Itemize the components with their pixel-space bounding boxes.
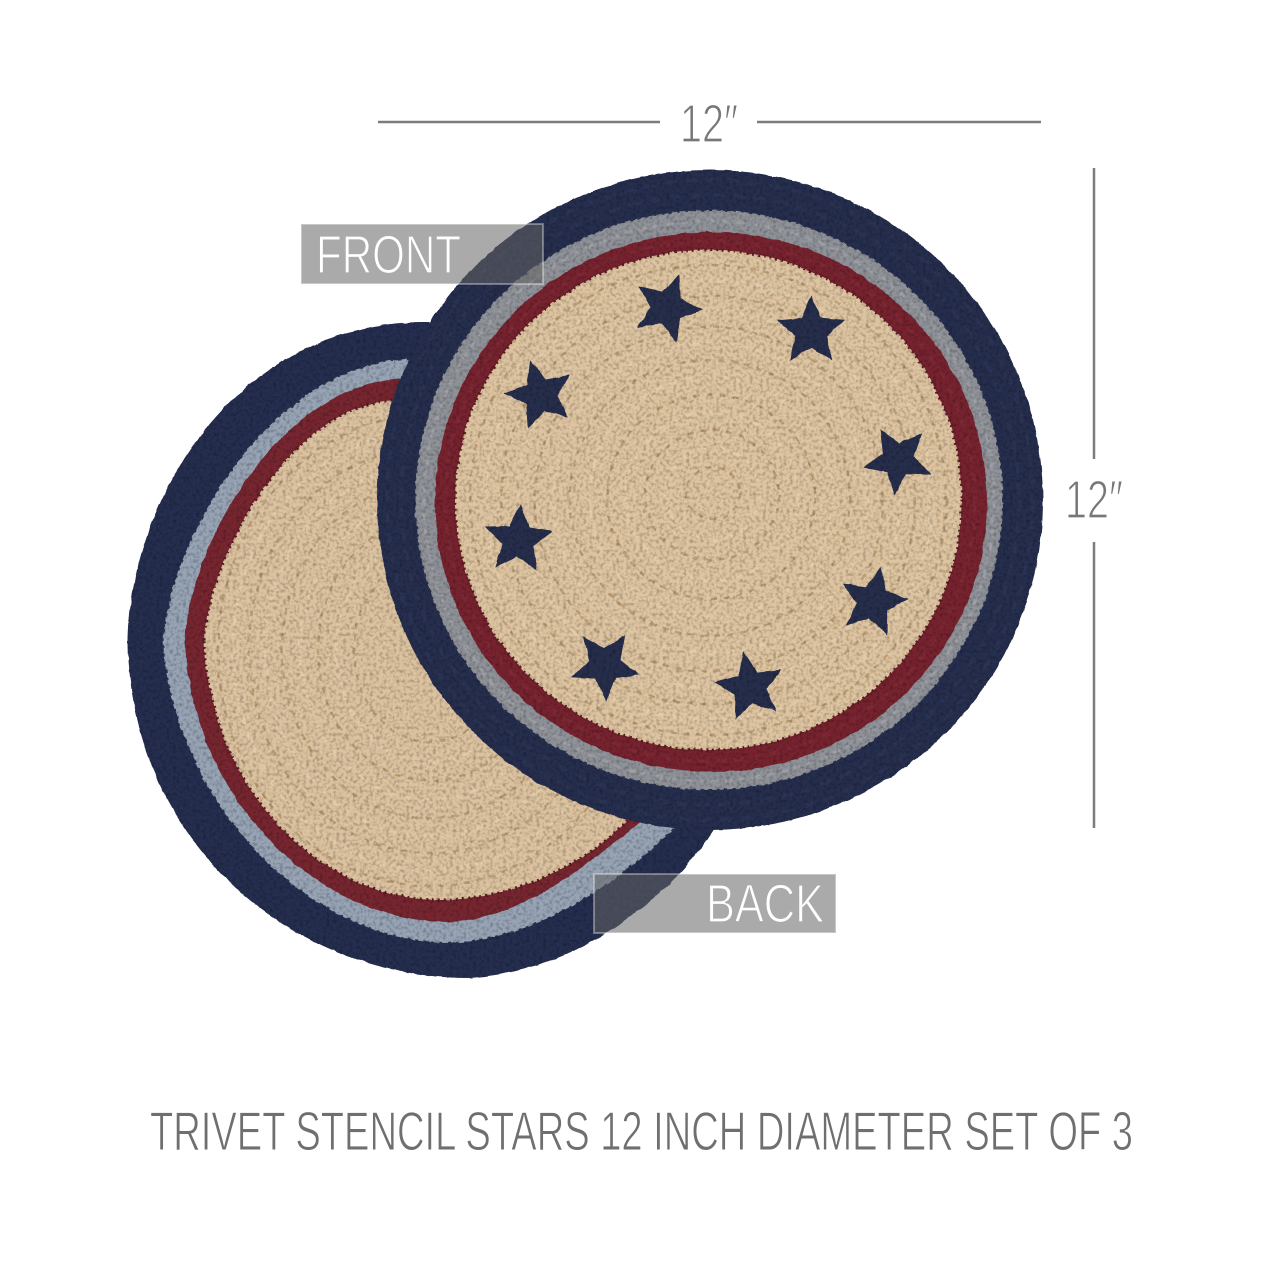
- star 3: [860, 427, 935, 499]
- front trivet gray braid row: [424, 221, 994, 781]
- width dimension: 12″: [680, 94, 738, 154]
- star 5: [710, 645, 789, 722]
- label: back: [594, 874, 836, 934]
- front trivet navy border: [377, 170, 1043, 830]
- stars ring: [482, 262, 935, 722]
- star 4: [833, 559, 914, 638]
- back trivet: [128, 322, 740, 978]
- star 7: [482, 502, 555, 571]
- label: back: BACK: [706, 874, 824, 934]
- front trivet navy braid rows: [387, 180, 1033, 820]
- front trivet tan centre: [455, 250, 962, 750]
- front trivet red braid row: [445, 241, 975, 761]
- back trivet tan centre: [204, 400, 660, 900]
- back trivet red ring: [185, 378, 680, 922]
- front trivet: [377, 170, 1043, 830]
- star 8: [497, 351, 581, 432]
- label: front: FRONT: [316, 225, 461, 285]
- front trivet red ring: [435, 232, 987, 772]
- front trivet braid rows: [470, 265, 946, 735]
- back trivet navy border: [128, 322, 740, 978]
- star 1: [625, 262, 711, 347]
- height dimension: 12″: [1065, 470, 1123, 530]
- back trivet braid rows: [218, 414, 642, 886]
- front trivet gray ring: [415, 210, 1003, 790]
- star 2: [777, 295, 845, 360]
- back trivet gray ring: [163, 358, 700, 943]
- star 6: [570, 635, 640, 702]
